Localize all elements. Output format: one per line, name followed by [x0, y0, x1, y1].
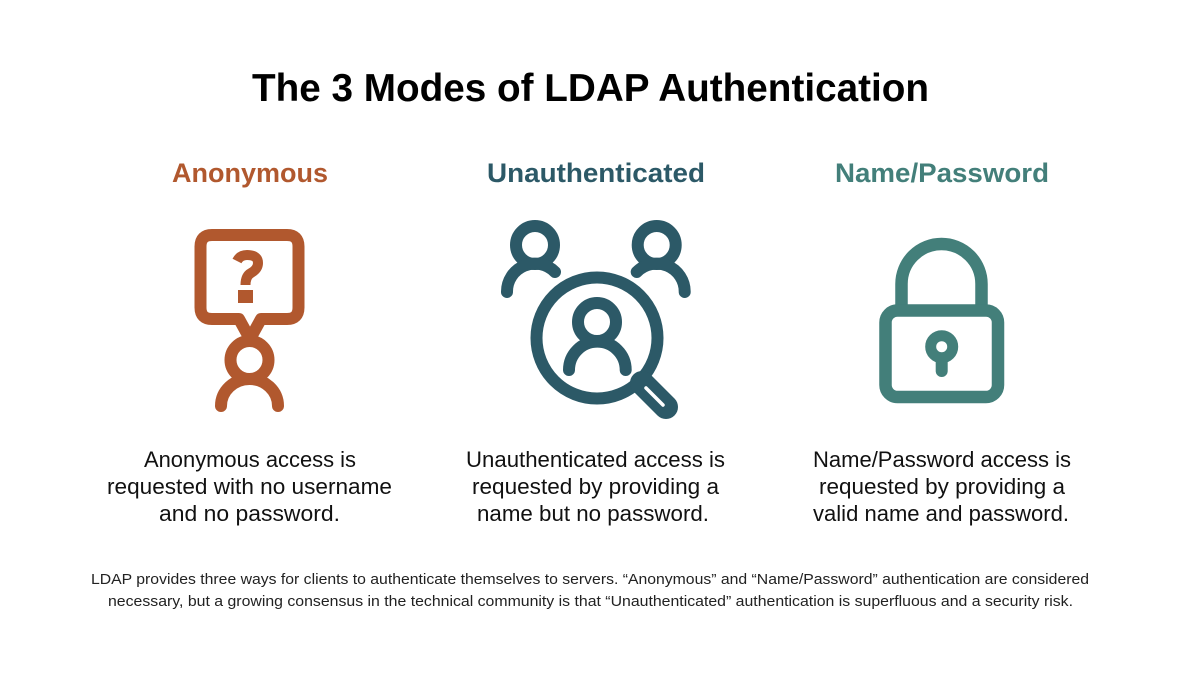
footnote [91, 571, 1089, 610]
description: unauthenticated [466, 447, 725, 526]
panel: anonymous [107, 158, 392, 526]
description: name/password: valid name and password. [813, 501, 1069, 526]
description: anonymous: requested with no username [107, 474, 392, 499]
description: unauthenticated: Unauthenticated access is [466, 447, 725, 472]
description: name/password [813, 447, 1071, 526]
panel: unauthenticated [466, 158, 725, 526]
description: name/password: Name/Password access is [813, 447, 1071, 472]
title: The 3 Modes of LDAP Authentication [252, 67, 929, 110]
panel: name/password [813, 158, 1071, 526]
description: unauthenticated: requested by providing a [472, 474, 720, 499]
description: anonymous: Anonymous access is [144, 447, 356, 472]
heading: name/password: Name/Password [835, 158, 1049, 188]
icon: person with question speech bubble [200, 235, 298, 406]
footnote: LDAP provides three ways for clients to authenticate themselves to servers. “Anonymous” and “Name/Password” authentication are considered [91, 571, 1089, 588]
description: name/password: requested by providing a [819, 474, 1066, 499]
description: anonymous: and no password. [159, 501, 340, 526]
heading: anonymous: Anonymous [172, 158, 328, 188]
heading: unauthenticated: Unauthenticated [487, 158, 705, 188]
icon: padlock [886, 244, 998, 397]
description: unauthenticated: name but no password. [477, 501, 709, 526]
icon: magnifier over users [507, 226, 685, 407]
description: anonymous [107, 447, 392, 526]
footnote: necessary, but a growing consensus in the technical community is that “Unauthenticated” authentication is superfluous and a security risk. [108, 593, 1073, 610]
